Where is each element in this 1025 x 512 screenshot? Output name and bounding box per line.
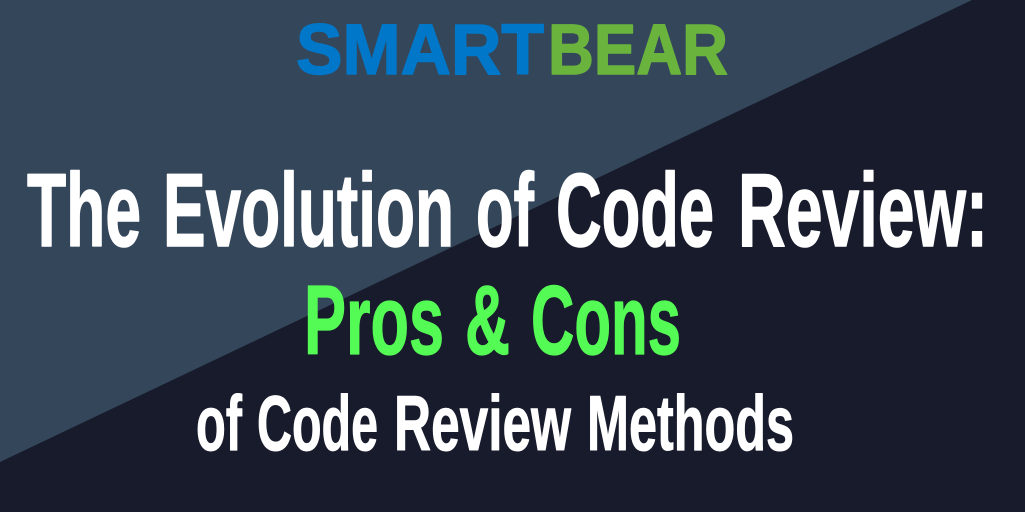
subtitle line: Review (394, 379, 571, 467)
title line 2: highlighted (304, 265, 681, 375)
logo: SmartBear wordmark (296, 11, 728, 90)
logo word: Bear: BEAR (548, 11, 728, 90)
title line 1: The (27, 153, 141, 269)
title line 2: highlighted: & (465, 265, 510, 375)
title line 1: Code (556, 153, 714, 269)
title line 1: Evolution (163, 153, 454, 269)
subtitle line: Methods (587, 379, 794, 467)
title line 1 (27, 153, 988, 269)
title line 2: highlighted: Cons (531, 265, 681, 375)
subtitle line: of (196, 379, 243, 467)
subtitle line (196, 379, 794, 467)
subtitle line: Code (257, 379, 378, 467)
title line 1: of (476, 153, 534, 269)
logo word: Smart: SMART (296, 11, 544, 90)
title line 2: highlighted: Pros (304, 265, 444, 375)
